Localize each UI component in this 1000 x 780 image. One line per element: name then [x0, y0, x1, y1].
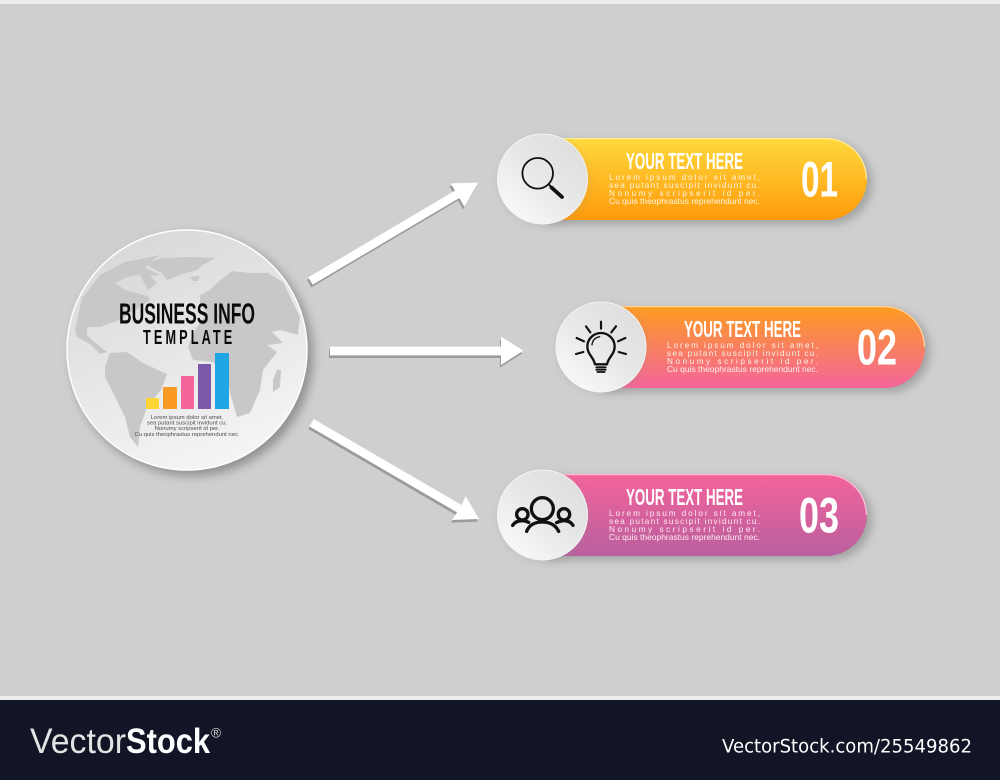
body text 02: Cu quis theophrastus reprehendunt nec. — [667, 365, 818, 374]
arrow: to item 01 — [307, 183, 478, 287]
heading 02: YOUR TEXT HERE — [684, 316, 801, 342]
footer logo — [30, 722, 221, 761]
body text 01: Lorem ipsum dolor sit amet, — [609, 173, 760, 182]
footer logo: Vector — [30, 722, 126, 761]
globe body text: Cu quis theophrastus reprehendunt nec. — [134, 432, 240, 438]
footer logo: ® — [211, 726, 221, 740]
globe panel — [67, 230, 313, 476]
body text 01: Cu quis theophrastus reprehendunt nec. — [609, 197, 760, 206]
number 03: 03 — [799, 488, 839, 544]
panel: item 01 — [498, 134, 872, 226]
body text 03: Lorem ipsum dolor sit amet, — [609, 509, 760, 518]
body text 03: sea putant suscipit invidunt cu. — [609, 517, 760, 526]
globe body text: Lorem ipsum dolor sit amet, — [151, 415, 224, 421]
body text 01: sea putant suscipit invidunt cu. — [609, 181, 760, 190]
icon: people group — [513, 498, 573, 531]
globe body text: Nonumy scripserit id per. — [155, 426, 220, 432]
panel: item 03 — [498, 470, 872, 562]
body text 03: Cu quis theophrastus reprehendunt nec. — [609, 533, 760, 542]
icon: magnifying glass — [522, 158, 562, 197]
world map — [75, 255, 300, 447]
globe body text: sea putant suscipit invidunt cu. — [147, 421, 227, 427]
arrow: to item 03 — [308, 419, 479, 523]
body text 02: Lorem ipsum dolor sit amet, — [667, 341, 818, 350]
heading 01: YOUR TEXT HERE — [626, 148, 743, 174]
title: business info: BUSINESS INFO — [119, 298, 255, 330]
panel: item 02 — [556, 302, 930, 394]
body text 02 — [667, 341, 818, 374]
body text 03 — [609, 509, 760, 542]
bar chart — [146, 353, 229, 409]
heading 03: YOUR TEXT HERE — [626, 484, 743, 510]
footer bar — [0, 700, 1000, 780]
icon: light bulb — [576, 322, 626, 372]
body text 01: Nonumy scripserit id per. — [609, 189, 760, 198]
footer logo: Stock — [126, 722, 210, 761]
body text 01 — [609, 173, 760, 206]
number 01: 01 — [801, 152, 838, 208]
globe body text — [134, 415, 240, 438]
body text 02: Nonumy scripserit id per. — [667, 357, 818, 366]
arrow: to item 02 — [329, 337, 523, 368]
number 02: 02 — [857, 320, 897, 376]
body text 02: sea putant suscipit invidunt cu. — [667, 349, 818, 358]
subtitle: template: TEMPLATE — [143, 326, 232, 349]
body text 03: Nonumy scripserit id per. — [609, 525, 760, 534]
footer image id: VectorStock.com/25549862 — [722, 737, 972, 758]
